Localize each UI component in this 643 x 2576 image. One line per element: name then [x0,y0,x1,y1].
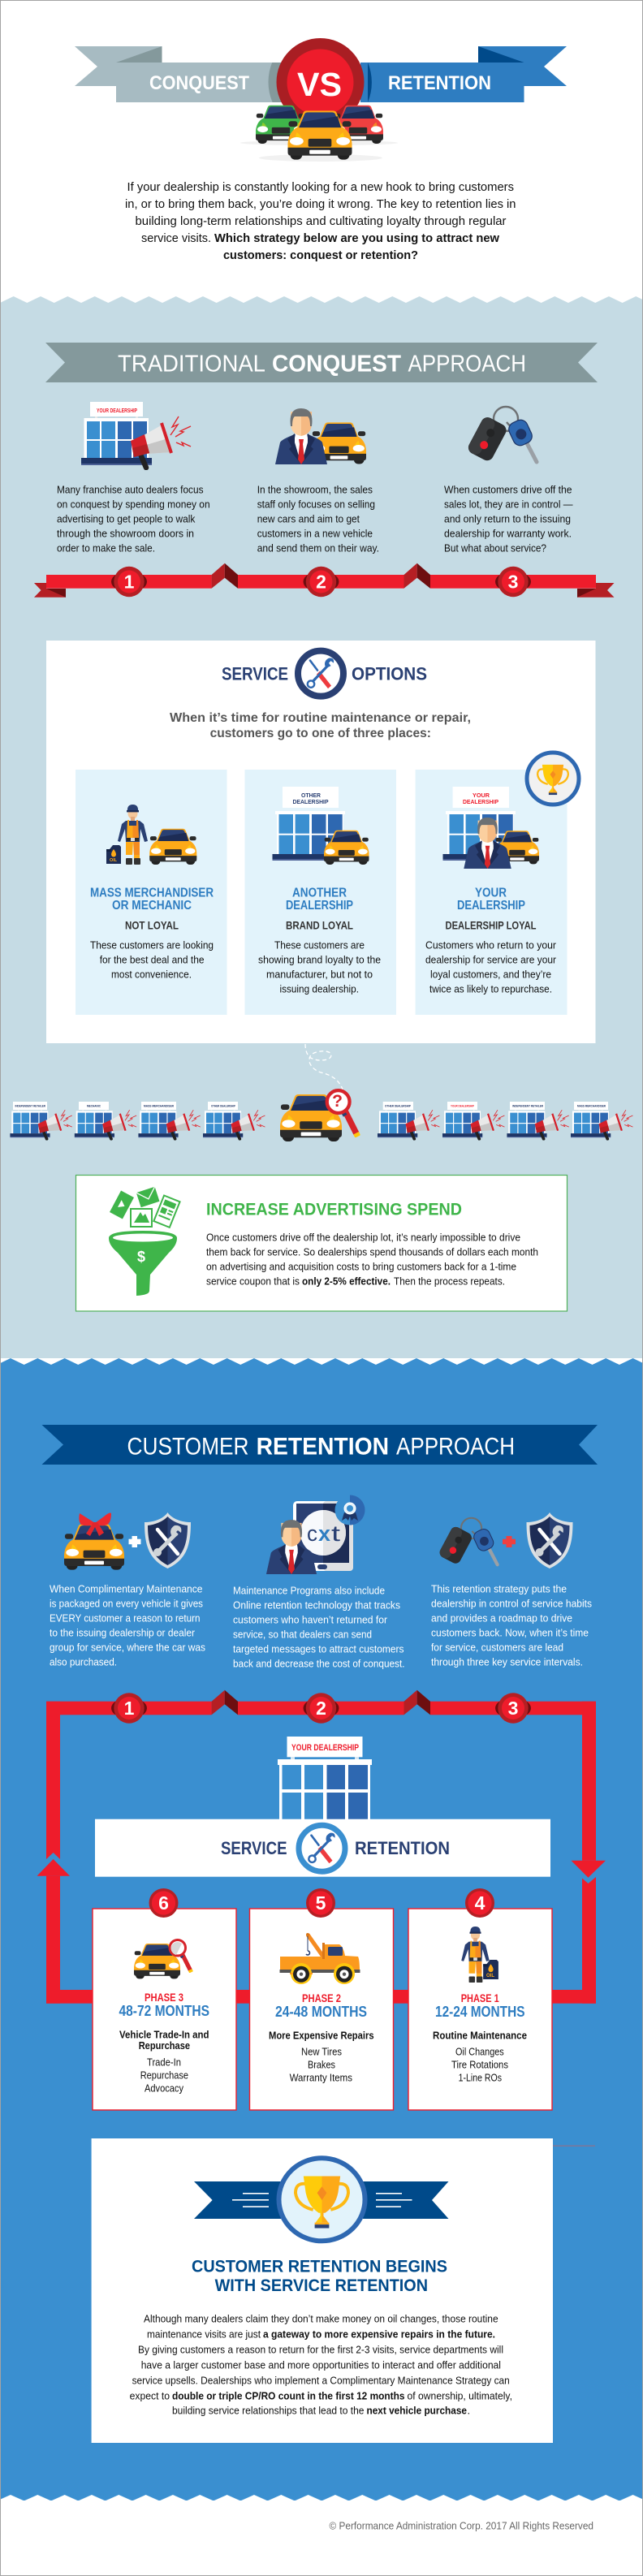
ribbon shadow right [368,63,372,102]
icon: other dealership building and car [273,787,369,865]
intro text: If your dealership is constantly looking for a new hook to bring customers [127,180,514,194]
text: retention 1: also purchased. [50,1656,117,1668]
badge 5 [306,1888,335,1918]
text: step 1: Many franchise auto dealers focus [57,484,204,495]
dealer 6: YOUR DEALERSHIP [451,1104,475,1107]
banner: traditional conquest approach: APPROACH [408,351,526,377]
badge 2: 2 [316,1698,326,1719]
panel: customer retention begins [92,2138,553,2443]
body text [130,2312,512,2416]
text: retention 3: This retention strategy puts the [431,1583,567,1594]
dealer 2: MECHANIC [87,1104,101,1107]
icon: cxt phone and salesman [266,1495,365,1574]
dealer 4: OTHER DEALERSHIP [211,1104,235,1107]
dealer 2 [75,1102,136,1139]
picture [131,1209,152,1227]
panel: service options [46,641,596,1043]
card: phase 1: PHASE 1 [461,1991,499,2004]
body text: Although many dealers claim they don’t make money on oil changes, those routine [144,2312,498,2325]
icon: mechanic with oil can [461,1927,498,1983]
card: your dealership: Customers who return to your [425,938,557,951]
heading: service options: OPTIONS [352,663,427,684]
text: step 2: customers in a new vehicle [257,528,373,539]
dealer 3 [138,1102,201,1139]
text: step 3: and only return to the issuing [444,513,571,524]
badge 2 [304,1693,339,1724]
dealer 8 [571,1102,632,1139]
icon: other dealership building and car: OTHER [301,792,322,799]
panel: increase advertising spend [76,1176,567,1311]
newspaper [153,1195,180,1228]
icon: cxt phone and salesman: x [318,1521,330,1546]
text: step 1: through the showroom doors in [57,528,194,539]
icon: mechanic with oil and car [106,805,196,865]
card: your dealership: YOUR [475,886,507,900]
text: step 2 [257,484,379,554]
card: another dealership: manufacturer, but not to [266,968,373,981]
icon: car keys [466,407,537,463]
card: phase 3: Advocacy [145,2082,183,2095]
badge 4 [465,1888,494,1918]
card: phase 2: 24-48 MONTHS [275,2004,367,2020]
background: retention section [0,1365,643,2500]
card: phase 1: Oil Changes [455,2046,504,2057]
badge 6 [149,1888,179,1918]
badge 2 [304,567,339,597]
card: mass merchandiser: most convenience. [111,968,192,981]
text: retention 1 [50,1583,205,1668]
card: mass merchandiser: These customers are looking [90,938,214,951]
card: mass merchandiser: OR MECHANIC [112,899,192,913]
dealer 8: MASS MERCHANDISER [577,1104,606,1107]
card: phase 1: Tire Rotations [451,2059,508,2070]
vs circle: VS [297,66,342,103]
card: your dealership: loyal customers, and they’re [430,968,551,981]
card: your dealership: dealership for service are your [425,953,557,966]
icon: mechanic with oil can: OIL [486,1974,494,1978]
icon: three cars [240,106,398,162]
icon: your dealership building [278,1737,372,1819]
icon: cxt phone and salesman: t [331,1521,341,1546]
icon: car with magnifying glass [134,1940,192,1978]
icon: marketing funnel: $ [137,1249,145,1265]
text: step 1: advertising to get people to walk [57,513,196,524]
funnel body [109,1231,177,1296]
card: another dealership: showing brand loyalty to the [258,953,381,966]
card: mass merchandiser: for the best deal and the [100,953,205,966]
title word: conquest: CONQUEST [149,72,249,94]
icon: other dealership building and car: DEALERSHIP [292,798,328,805]
icon: salesman and car [275,408,366,464]
icon: dealership with megaphone: YOUR DEALERSHIP [97,407,137,414]
text: step 3 [444,484,573,554]
icon: trophy badge [527,753,579,805]
text: retention 3: dealership in control of service habits [431,1598,592,1609]
text: retention 2: Maintenance Programs also include [233,1585,385,1596]
card: phase 3: PHASE 3 [145,1991,183,2004]
body text: have a larger customer base and more opportunities to interact and offer additional [141,2359,501,2371]
text: retention 3: customers back. Now, when it’s time [431,1627,589,1638]
banner: traditional conquest approach: TRADITIONAL [118,351,265,377]
icon: trophy emblem [194,2158,448,2241]
body text: next vehicle purchase [367,2405,467,2416]
text: step 3: But what about service? [444,542,546,554]
card: your dealership [416,770,567,1015]
intro text: customers: conquest or retention? [223,248,418,262]
panel: service retention: SERVICE [221,1838,287,1858]
body text: maintenance visits are just [147,2328,261,2340]
text: retention 2: service, so that dealers can send [233,1629,372,1640]
text: step 2: staff only focuses on selling [257,498,375,510]
panel: customer retention begins: CUSTOMER RETENTION BEGINS [192,2258,447,2276]
banner: customer retention approach: APPROACH [396,1434,515,1461]
car with magnifying glass: ? [332,1092,343,1111]
intro text: in, or to bring them back, you’re doing it wrong. The key to retention lies in [125,197,516,211]
card: phase 1: 12-24 MONTHS [435,2004,524,2020]
text: step 3: When customers drive off the [444,484,572,495]
vs circle [276,38,364,126]
card: another dealership: These customers are [274,938,365,951]
text: retention 2: Online retention technology that tracks [233,1599,400,1611]
text: step 2: new cars and aim to get [257,513,360,524]
badge 5: 5 [316,1892,326,1914]
text: retention 1: group for service, where the car was [50,1642,205,1653]
card: phase 3: Vehicle Trade-In and [119,2028,209,2041]
dealer 5: OTHER DEALERSHIP [385,1104,412,1107]
title word: retention: RETENTION [388,72,491,94]
card: phase 2: More Expensive Repairs [269,2030,374,2041]
body text: building service relationships that lead to the [172,2405,364,2416]
heading: service options [222,651,427,697]
text: step 1: on conquest by spending money on [57,498,210,510]
body text: double or triple CP/RO count in the first 12 months [172,2390,404,2401]
card: another dealership: ANOTHER [292,886,347,900]
intro text: building long-term relationships and cultivating loyalty through regular [135,214,507,228]
banner: customer retention approach [42,1425,598,1465]
dealer 7 [507,1102,569,1139]
card: phase 2: Brakes [308,2059,335,2070]
body text: . [468,2405,470,2416]
banner: customer retention approach: CUSTOMER [127,1434,248,1461]
bow [79,1513,111,1536]
banner: traditional conquest approach [45,343,598,382]
subheading [170,711,471,740]
header ribbon [75,46,567,102]
subheading: When it’s time for routine maintenance or repair, [170,711,471,725]
banner: traditional conquest approach: CONQUEST [272,351,401,377]
card: mass merchandiser: MASS MERCHANDISER [90,886,214,900]
text: step 1 [57,484,210,554]
banner: customer retention approach: RETENTION [257,1434,389,1461]
text: step 1: order to make the sale. [57,542,155,554]
card: another dealership: DEALERSHIP [286,899,353,913]
card: your dealership: DEALERSHIP LOYAL [445,919,537,932]
text: step 3: sales lot, they are in control — [444,498,573,510]
card: your dealership: twice as likely to repurchase. [429,982,552,995]
card: phase 3: Trade-In [147,2056,181,2069]
row: competing dealerships and car [10,1090,632,1141]
background: conquest section [0,303,643,1358]
dealer 6 [442,1102,504,1139]
text: retention 3: and provides a roadmap to drive [431,1612,572,1624]
card: phase 1: 1-Line ROs [459,2072,502,2083]
panel: increase advertising spend: on advertising and acquisition costs to bring customers back for a 1-time [206,1260,516,1273]
panel: increase advertising spend: INCREASE ADVERTISING SPEND [206,1201,462,1219]
dealer 1: INDEPENDENT RETAILER [15,1104,45,1107]
icon: mechanic with oil and car: OIL [110,858,118,863]
heading: service options: SERVICE [222,663,288,684]
dealer 1 [10,1102,72,1139]
badge 3: 3 [508,1698,518,1719]
icon: gift car plus shield [64,1512,191,1570]
panel: increase advertising spend: only 2-5% effective. [302,1275,391,1288]
text: retention 3 [431,1583,592,1668]
dealer 3: MASS MERCHANDISER [144,1104,174,1107]
intro text: service visits. [141,231,211,245]
text: retention 2: back and decrease the cost of conquest. [233,1658,404,1669]
dealer 4 [203,1102,265,1139]
card: phase 1: Routine Maintenance [433,2030,527,2041]
card: another dealership [245,770,396,1015]
text: retention 2: customers who haven’t returned for [233,1614,388,1625]
body text: service upsells. Dealerships who implement a Complimentary Maintenance Strategy can [132,2374,510,2387]
card: mass merchandiser [76,770,227,1015]
text: retention 3: for service, customers are lead [431,1642,563,1653]
dealer 7: INDEPENDENT RETAILER [512,1104,543,1107]
text: retention 1: EVERY customer a reason to return [50,1612,200,1624]
icon: cxt phone and salesman: c [307,1521,317,1546]
card: phase 2: New Tires [301,2046,342,2057]
card: phase 3: Repurchase [139,2039,190,2052]
panel: increase advertising spend: service coupon that is [206,1275,300,1288]
badge 3: 3 [508,572,518,593]
icon: your dealership building with salesman and car [443,787,539,869]
card: phase 3: 48-72 MONTHS [119,2003,209,2019]
text: retention 1: to the issuing dealership or dealer [50,1627,196,1638]
icon: your dealership building with salesman and car: YOUR [473,792,490,799]
badge 6: 6 [158,1892,169,1914]
body text: a gateway to more expensive repairs in the future. [263,2328,495,2340]
faint line right of final panel [553,2145,595,2147]
panel: increase advertising spend: them back for service. So dealerships spend thousands of dollars each month [206,1245,538,1258]
card: phase 3: Repurchase [140,2069,188,2082]
text: retention 2 [233,1585,404,1669]
badge 1 [111,1693,147,1724]
card: phase 2: PHASE 2 [302,1991,341,2004]
text: retention 2: targeted messages to attract customers [233,1643,404,1655]
card: phase 2: Warranty Items [290,2072,352,2083]
card: mass merchandiser: NOT LOYAL [125,919,179,932]
text: step 3: dealership for warranty work. [444,528,572,539]
text: step 2: and send them on their way. [257,542,379,554]
panel: customer retention begins: WITH SERVICE RETENTION [215,2276,428,2295]
panel: service retention: RETENTION [355,1838,450,1858]
card: your dealership: DEALERSHIP [457,899,525,913]
video strip [110,1191,134,1219]
dealer 5 [378,1102,439,1139]
envelope [136,1187,160,1207]
badge 3 [495,1693,531,1724]
body text: By giving customers a reason to return for the first 2-3 visits, service departments will [138,2343,503,2356]
card: phase 2 [250,1888,393,2110]
card: phase 1 [408,1888,552,2110]
subheading: customers go to one of three places: [210,727,431,740]
panel: service retention [95,1819,550,1877]
badge 1: 1 [124,1698,135,1719]
badge 4: 4 [475,1892,485,1914]
panel: increase advertising spend: Once customers drive off the dealership lot, it’s nearly impossible to drive [206,1231,520,1244]
text: step 2: In the showroom, the sales [257,484,373,495]
text: retention 1: When Complimentary Maintenance [50,1583,203,1594]
text: retention 3: through three key service intervals. [431,1656,583,1668]
icon: tow truck [279,1933,360,1984]
icon: your dealership building with salesman and car: DEALERSHIP [463,798,498,805]
card: phase 3 [93,1888,236,2110]
card: another dealership: issuing dealership. [279,982,359,995]
icon: marketing funnel [109,1187,180,1296]
car with magnifying glass [280,1090,358,1141]
icon: dealership with megaphone [81,402,191,468]
badge 1: 1 [124,572,135,593]
ribbon shadow left [268,63,282,102]
badge 1 [111,567,147,597]
body text: of ownership, ultimately, [408,2390,512,2401]
badge 2: 2 [316,572,326,593]
body text: expect to [130,2390,170,2401]
icon: keys plus shield [438,1512,573,1568]
panel: increase advertising spend: Then the process repeats. [394,1275,505,1288]
icon: your dealership building: YOUR DEALERSHIP [291,1743,359,1753]
footer copyright: © Performance Administration Corp. 2017 All Rights Reserved [330,2520,593,2531]
badge 3 [495,567,531,597]
intro text: Which strategy below are you using to attract new [214,231,499,245]
dashed path [305,1044,343,1092]
retention loop with arrows [37,1690,606,2004]
card: another dealership: BRAND LOYAL [286,919,353,932]
text: retention 1: is packaged on every vehicle it gives [50,1598,203,1609]
intro text [125,180,516,262]
red timeline ribbon [34,563,614,598]
